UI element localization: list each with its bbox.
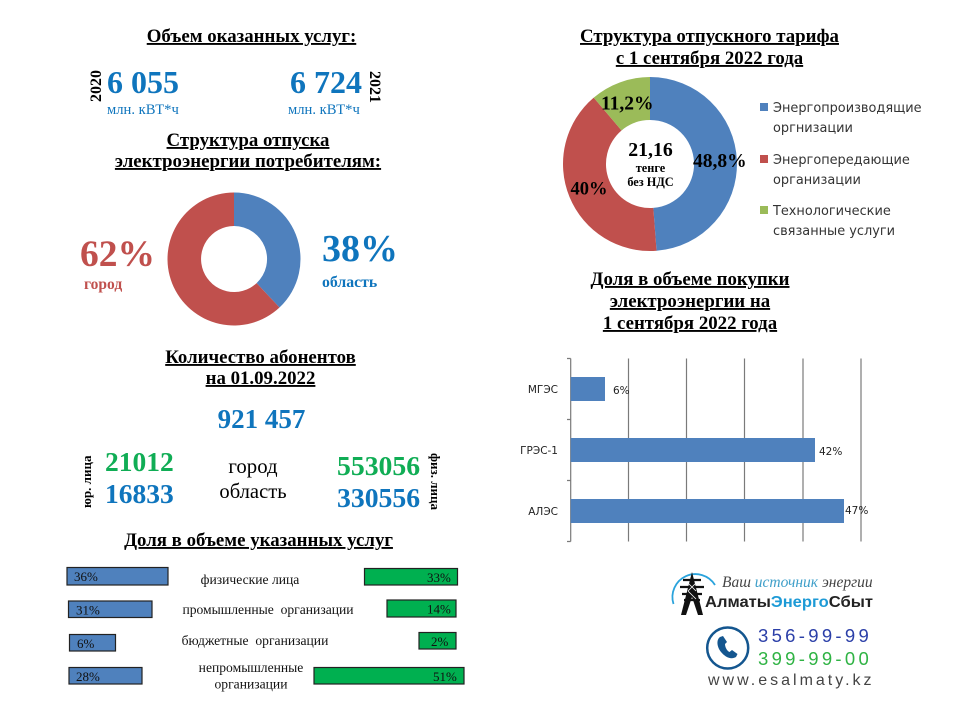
legend: tariff structure: Энергопередающие	[773, 153, 910, 168]
region individuals: 330556	[337, 482, 420, 513]
bar: ГРЭС-1	[520, 438, 842, 462]
heading: purchase share: электроэнергии на	[610, 291, 771, 312]
company name: Алматы ЭнергоСбыт	[705, 594, 873, 611]
year label 2021: 2021	[366, 71, 383, 103]
slice label 48,8%: 48,8%	[693, 151, 747, 172]
bar: МГЭС: МГЭС	[528, 384, 558, 396]
unit 2021: млн. кВТ*ч	[288, 102, 360, 118]
slice label 11,2%: 11,2%	[601, 94, 654, 114]
tagline: Ваш источник энергии	[722, 574, 873, 591]
heading: volume of services: Объем оказанных услуг:	[147, 26, 356, 47]
bar: МГЭС: 6%	[613, 385, 630, 397]
label: region 38%	[322, 228, 398, 291]
phone number 2: 399-99-00	[758, 648, 872, 669]
value 2020: 6 055	[107, 64, 179, 100]
phone number 1: 356-99-99	[758, 625, 872, 646]
slice label 40%: 40%	[570, 180, 608, 200]
year label 2020: 2020	[88, 70, 105, 102]
row: non-industrial: 51%	[433, 669, 457, 684]
panel: volume of services	[88, 64, 383, 118]
legend: tariff structure: Технологические	[772, 204, 891, 219]
bar: АЛЭС: 47%	[845, 505, 868, 517]
bar: АЛЭС: АЛЭС	[528, 506, 558, 518]
heading: purchase share: 1 сентября 2022 года	[603, 313, 778, 334]
icon: power tower	[672, 572, 715, 615]
bar: МГЭС	[528, 377, 630, 401]
logo: АлматыЭнергоСбыт	[672, 572, 873, 615]
label: city 62%	[80, 234, 155, 293]
heading: subscribers: Количество абонентов	[165, 347, 356, 368]
legend: tariff structure	[760, 101, 922, 239]
label: legal entities: юр. лица	[79, 455, 94, 508]
chart: tariff donut	[563, 77, 747, 251]
region label: область	[219, 481, 287, 503]
legend: tariff structure: организации	[773, 173, 861, 188]
contacts	[707, 625, 875, 689]
heading: share of services: Доля в объеме указанных услуг	[124, 530, 393, 551]
heading: supply structure: электроэнергии потребителям:	[115, 151, 381, 172]
chart: purchase share bars	[520, 358, 868, 542]
region legal entities: 16833	[105, 478, 174, 509]
total subscribers: 921 457	[218, 404, 305, 434]
heading: tariff structure: Структура отпускного тарифа	[580, 26, 840, 47]
icon: phone	[707, 628, 748, 668]
row: non-industrial: организации	[215, 676, 287, 692]
row: budget: 2%	[431, 634, 448, 649]
row: budget	[70, 632, 456, 651]
panel: subscribers breakdown	[79, 446, 443, 513]
value 2021: 6 724	[290, 64, 362, 100]
heading: tariff structure: с 1 сентября 2022 года	[616, 48, 804, 69]
bar: ГРЭС-1: ГРЭС-1	[520, 445, 558, 457]
city label: город	[228, 455, 278, 478]
label: individuals: физ. лица	[428, 453, 443, 510]
label: city 62%: 62%	[80, 234, 155, 275]
center unit: без НДС	[627, 175, 674, 189]
unit 2020: млн. кВТ*ч	[107, 102, 179, 118]
city individuals: 553056	[337, 450, 420, 481]
row: industrial: 31%	[76, 602, 100, 618]
chart: city/region donut	[168, 192, 301, 326]
website: www.esalmaty.kz	[707, 672, 875, 689]
row: individuals	[67, 568, 458, 587]
legend: tariff structure: связанные услуги	[773, 224, 895, 239]
row: non-industrial: 28%	[76, 669, 100, 684]
heading: purchase share: Доля в объеме покупки	[590, 269, 790, 290]
label: region 38%: 38%	[322, 228, 398, 270]
legend: tariff structure: оргнизации	[773, 121, 853, 136]
heading: subscribers: на 01.09.2022	[206, 368, 315, 389]
city legal entities: 21012	[105, 446, 174, 477]
row: industrial	[68, 600, 456, 618]
label: region 38%: область	[322, 274, 377, 291]
center total: 21,16	[628, 139, 673, 161]
legend: tariff structure: Энергопроизводящие	[773, 101, 922, 116]
row: budget: бюджетные организации	[182, 633, 328, 648]
row: individuals: 33%	[427, 570, 451, 585]
row: non-industrial: непромышленные	[199, 660, 303, 675]
row: industrial: 14%	[427, 602, 451, 616]
bar: АЛЭС	[528, 499, 868, 523]
row: budget: 6%	[77, 636, 94, 651]
bar: ГРЭС-1: 42%	[819, 446, 842, 458]
row: individuals: физические лица	[201, 572, 299, 587]
label: city 62%: город	[84, 276, 122, 293]
chart: share of services paired bars	[67, 568, 464, 692]
heading: supply structure: Структура отпуска	[167, 130, 330, 151]
row: non-industrial	[69, 660, 464, 692]
center unit: тенге	[636, 161, 666, 175]
row: industrial: промышленные организации	[182, 602, 354, 617]
row: individuals: 36%	[74, 569, 98, 584]
